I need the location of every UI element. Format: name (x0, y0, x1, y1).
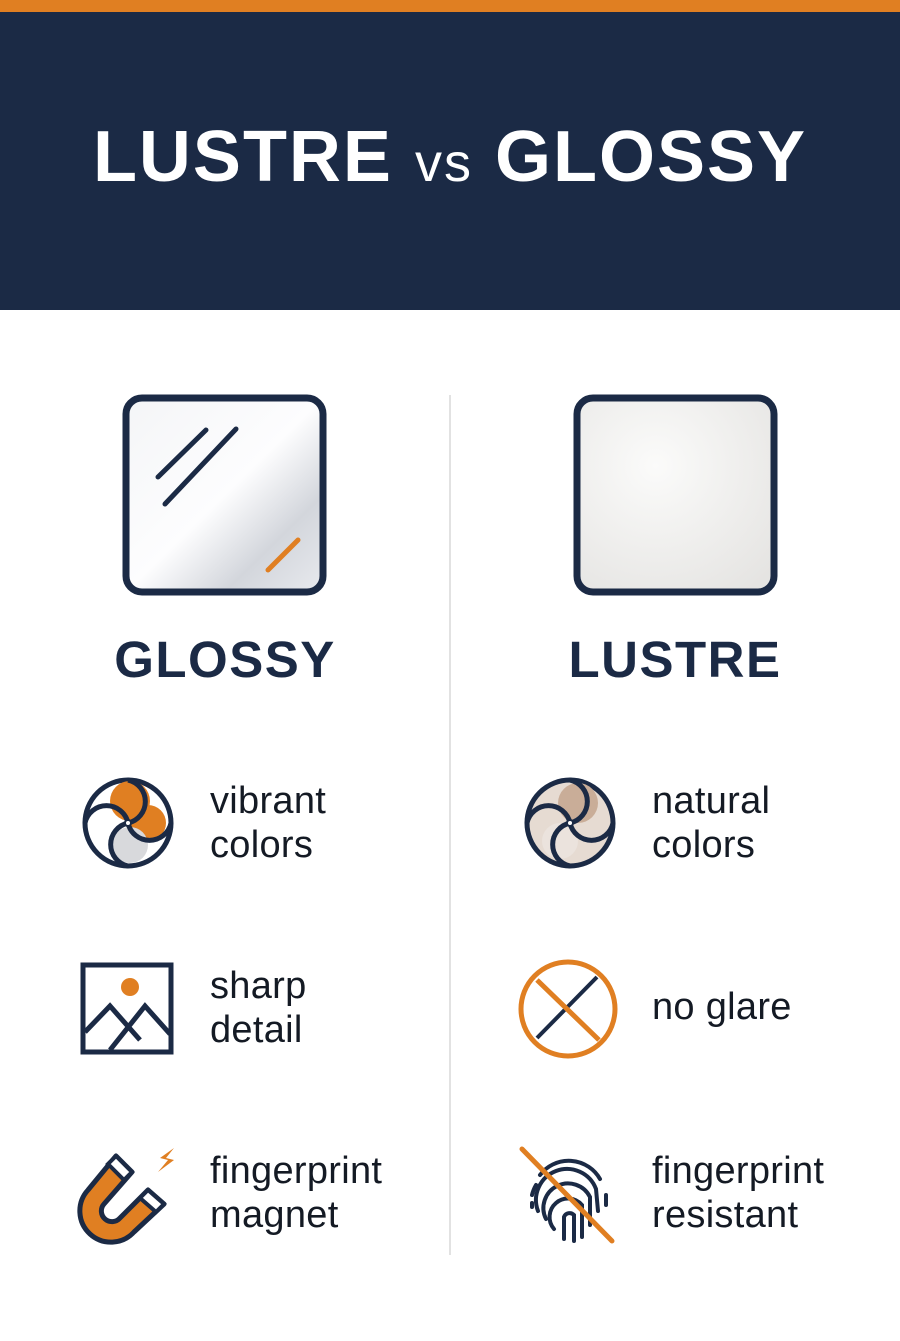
text: vibrant colors: colors (210, 824, 313, 866)
text: natural colors: colors (652, 824, 755, 866)
icon: natural colors (524, 778, 616, 868)
icon: vibrant colors (82, 778, 174, 868)
text: sharp detail (210, 965, 307, 1051)
icon: glossy sample (122, 394, 326, 596)
text: fingerprint resistant: resistant (652, 1194, 798, 1236)
icon: sharp detail (80, 962, 174, 1054)
text: fingerprint resistant (652, 1150, 824, 1236)
icon: no glare (518, 960, 618, 1058)
text: fingerprint resistant: fingerprint (652, 1150, 824, 1192)
text: sharp detail: detail (210, 1009, 303, 1051)
heading: lustre: LUSTRE (568, 631, 782, 688)
text: vibrant colors (210, 780, 326, 866)
text: no glare: no glare (652, 986, 792, 1028)
divider (449, 395, 451, 1255)
top accent bar (0, 0, 900, 12)
title: LUSTRE vs GLOSSY (93, 117, 807, 197)
text: natural colors: natural (652, 780, 770, 822)
text: natural colors (652, 780, 770, 866)
header banner (0, 12, 900, 310)
text: fingerprint magnet: magnet (210, 1194, 339, 1236)
heading: glossy: GLOSSY (114, 631, 336, 688)
text: sharp detail: sharp (210, 965, 307, 1007)
text: vibrant colors: vibrant (210, 780, 326, 822)
text: fingerprint magnet (210, 1150, 382, 1236)
icon: magnet (77, 1148, 174, 1245)
icon: fingerprint resistant (520, 1146, 614, 1244)
icon: lustre sample (574, 394, 778, 596)
text: fingerprint magnet: fingerprint (210, 1150, 382, 1192)
